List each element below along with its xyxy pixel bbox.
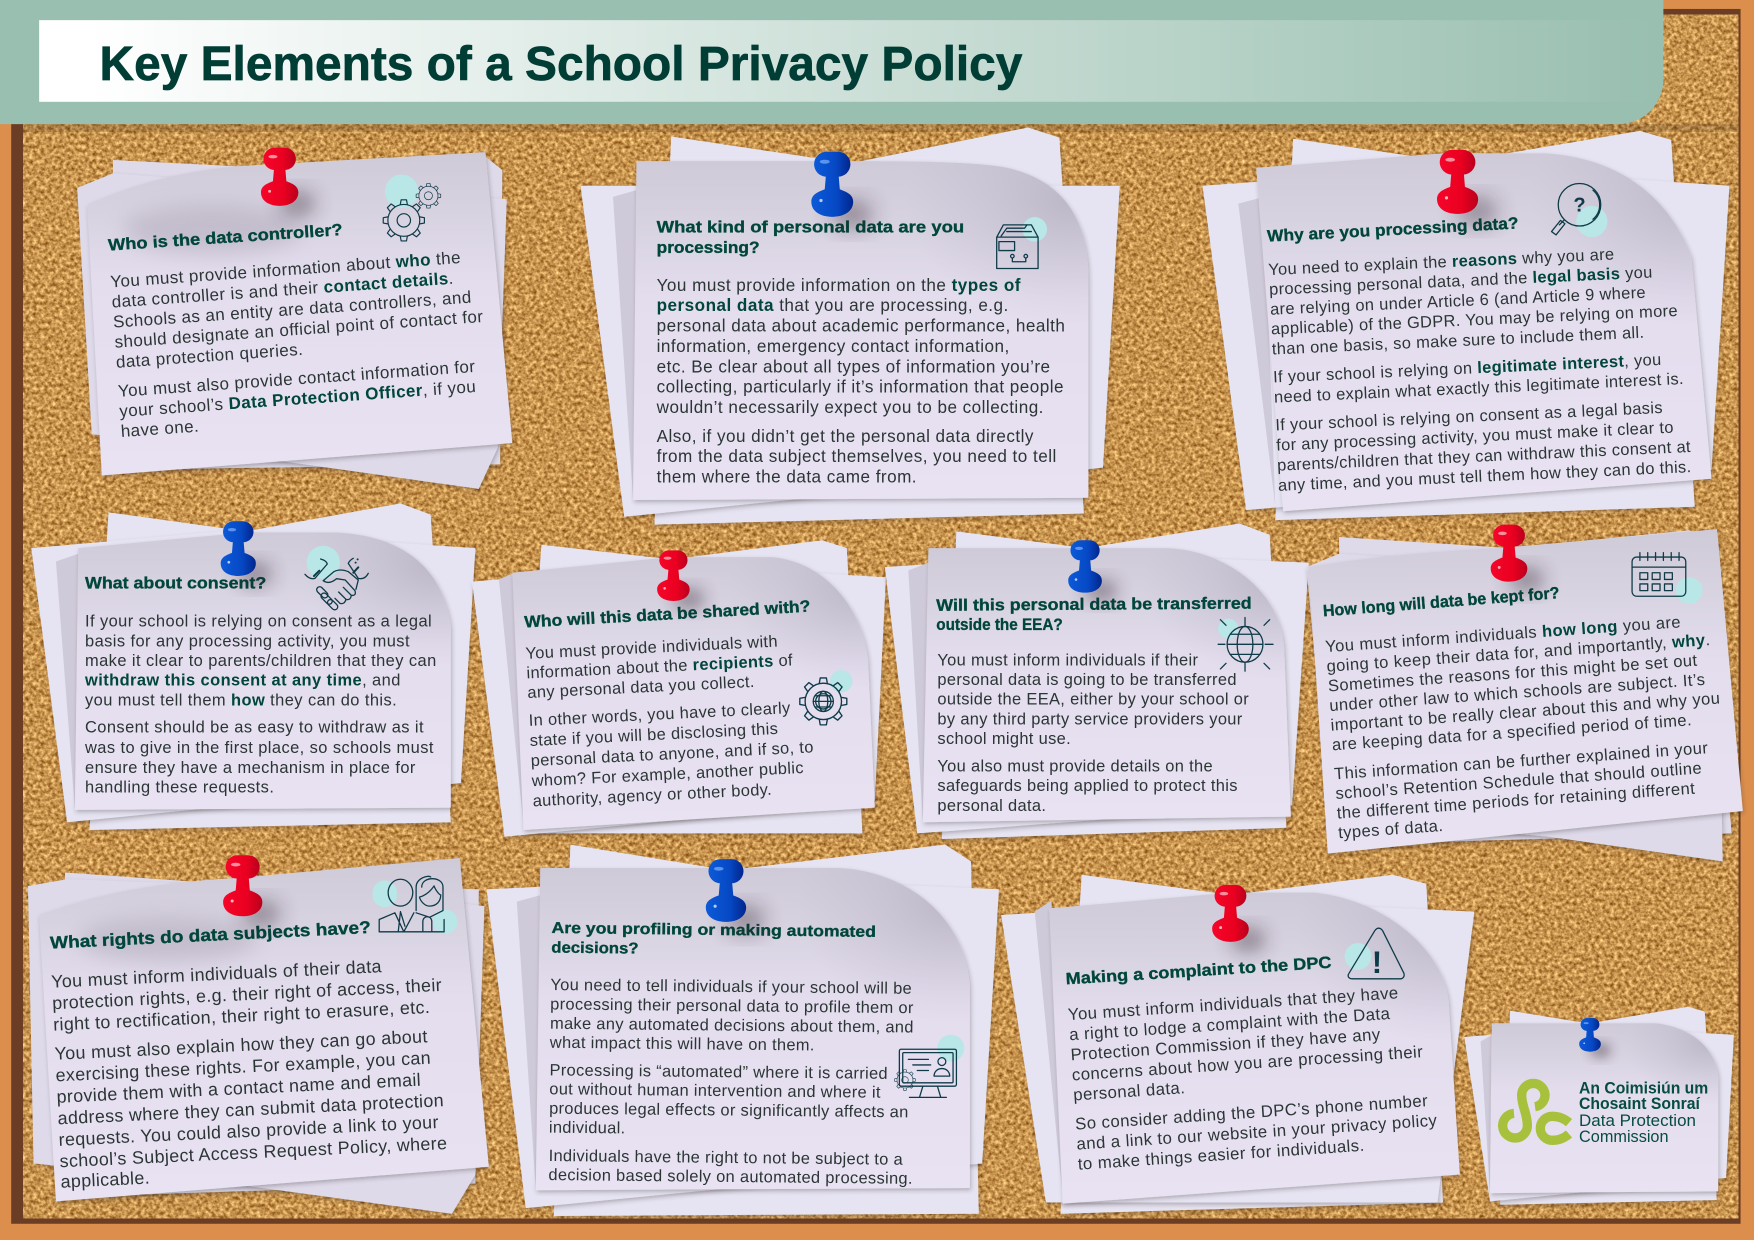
panel: who will this data be shared with (472, 540, 886, 837)
body text: a right to lodge a complaint with the Data (1069, 1004, 1391, 1044)
body text: authority, agency or other body. (532, 781, 772, 810)
body text: ensure they have a mechanism in place for (85, 759, 416, 777)
body text: So consider adding the DPC’s phone number (1075, 1091, 1429, 1134)
body text (1067, 981, 1439, 1174)
body text: Protection Commission if they have any (1070, 1025, 1381, 1064)
heading: What about consent? (85, 574, 266, 592)
body text: data protection queries. (115, 340, 304, 372)
body text: withdraw this consent at any time, and (84, 672, 401, 690)
panel: how long will data be kept for (1307, 525, 1743, 861)
panel: making a complaint to the DPC (1001, 875, 1474, 1214)
body text: personal data. (937, 797, 1046, 815)
paper stack (487, 845, 999, 1216)
panel: transfer outside the EEA (885, 524, 1309, 839)
body text: school’s Retention Schedule that should outline (1335, 758, 1703, 803)
body text: You must also explain how they can go about (54, 1026, 428, 1064)
body text: state if you will be disclosing this (529, 720, 779, 750)
body text: You need to tell individuals if your school will be (550, 976, 912, 998)
body text: processing personal data, and the legal basis you (1269, 263, 1653, 299)
body text: types of data. (1338, 816, 1444, 842)
heading: decisions? (551, 940, 639, 958)
paper stack (28, 858, 489, 1214)
body text: to make things easier for individuals. (1077, 1136, 1365, 1174)
body text: Processing is “automated” where it is carried (549, 1061, 888, 1083)
body text: This information can be further explained in your (1333, 738, 1709, 783)
body text: You need to explain the reasons why you are (1268, 245, 1615, 279)
heading: Are you profiling or making automated (551, 920, 876, 941)
body text: the different time periods for retaining different (1336, 779, 1696, 823)
body text: outside the EEA, either by your school or (937, 691, 1249, 709)
body text: personal data is going to be transferred (937, 671, 1237, 689)
panel: Data Protection Commission logo (1464, 1007, 1734, 1205)
logo text (1579, 1079, 1708, 1146)
body text (1325, 610, 1728, 842)
icon: monitor with person (895, 1035, 964, 1097)
body text: You must also provide contact information for (117, 357, 476, 401)
body text: You must inform individuals how long you are (1325, 612, 1682, 656)
body text: personal data. (1073, 1078, 1186, 1105)
pin (657, 550, 705, 610)
title banner (0, 0, 1663, 124)
heading: How long will data be kept for? (1322, 584, 1560, 620)
logo text: Commission (1579, 1127, 1669, 1146)
pin (261, 148, 315, 216)
icon: gears (383, 175, 441, 241)
body text: right to rectification, their right to erasure, etc. (53, 997, 431, 1035)
body text: Also, if you didn’t get the personal data directly (657, 427, 1034, 446)
body text: You must inform individuals if their (937, 652, 1198, 670)
body text (524, 631, 816, 810)
body text: should designate an official point of contact for (114, 307, 484, 352)
icon: two people (373, 876, 458, 934)
paper stack (885, 524, 1309, 839)
pin (1212, 885, 1266, 952)
body text: data controller is and their contact details. (111, 269, 454, 312)
logo text: An Coimisiún um (1579, 1079, 1708, 1098)
body text: important to be really clear about this and why you (1330, 689, 1721, 735)
body text: protection rights, e.g. their right of access, their (52, 975, 442, 1013)
body text: your school’s Data Protection Officer, if you (119, 377, 477, 421)
body text: If your school is relying on legitimate interest, you (1273, 351, 1662, 386)
body text: You also must provide details on the (937, 757, 1213, 775)
body text: address where they can submit data protection (57, 1090, 444, 1128)
body text: whom? For example, another public (530, 759, 804, 790)
body text: You must provide information on the types of (657, 276, 1021, 295)
icon: magnifier with question mark (1552, 183, 1607, 237)
logo mark (1503, 1083, 1569, 1140)
body text: personal data that you are processing, e.g. (657, 296, 1009, 315)
icon: gear with globe (800, 670, 852, 725)
heading: Will this personal data be transferred (936, 595, 1252, 615)
body text (51, 953, 451, 1192)
panel: what kind of personal data (581, 128, 1120, 525)
body text: etc. Be clear about all types of information you’re (657, 357, 1051, 376)
body text: make any automated decisions about them, and (550, 1015, 914, 1036)
body text: personal data about academic performance, health (657, 317, 1065, 336)
body text: handling these requests. (85, 779, 274, 797)
body text: Schools as an entity are data controllers, and (113, 288, 472, 332)
body text: and a link to our website in your privacy policy (1076, 1111, 1438, 1154)
body text (84, 612, 437, 797)
body text: any time, and you must tell them how they can do this. (1278, 458, 1692, 495)
body text: personal data to anyone, and if so, to (530, 738, 814, 770)
icon: handshake (305, 546, 368, 611)
pin (223, 855, 280, 927)
body text: If your school is relying on consent as a legal (85, 612, 432, 630)
body text: safeguards being applied to protect this (937, 777, 1238, 795)
paper stack (1307, 529, 1743, 861)
icon: warning triangle: ! (1372, 945, 1382, 980)
body text: make it clear to parents/children that they can (85, 652, 437, 670)
body text: you must tell them how they can do this. (85, 691, 397, 709)
body text: information, emergency contact information, (657, 337, 1010, 356)
heading: What kind of personal data are you (657, 219, 964, 237)
body text: going to keep their data for, and importantly, why. (1326, 630, 1711, 676)
icon: filing box (997, 217, 1047, 268)
body text: In other words, you have to clearly (528, 699, 791, 730)
body text: exercising these rights. For example, you can (55, 1048, 431, 1085)
title: Key Elements of a School Privacy Policy (100, 37, 1023, 91)
body text: If your school is relying on consent as a legal basis (1275, 399, 1663, 435)
pin (706, 859, 765, 933)
logo text: Chosaint Sonraí (1579, 1094, 1701, 1113)
panel: why are you processing data (1203, 131, 1729, 520)
body text: requests. You could also provide a link to your (58, 1112, 439, 1150)
logo text: Data Protection (1579, 1111, 1696, 1130)
body text: Sometimes the reasons for this might be set out (1327, 651, 1698, 695)
body text: You must provide individuals with (525, 633, 778, 663)
heading (551, 920, 876, 960)
heading: Who is the data controller? (108, 221, 343, 255)
body text (547, 976, 915, 1188)
paper stack (77, 152, 512, 489)
body text: school’s Subject Access Request Policy, where (59, 1133, 448, 1171)
heading: processing? (657, 239, 760, 257)
icon: globe with arrows (1218, 617, 1273, 671)
body text: what impact this will have on them. (549, 1034, 815, 1054)
body text: them where the data came from. (657, 468, 917, 487)
panel: profiling or automated decisions (487, 845, 999, 1216)
body text: basis for any processing activity, you must (85, 633, 410, 651)
pin (221, 521, 272, 585)
body text: provide them with a contact name and email (56, 1070, 421, 1107)
heading: Why are you processing data? (1267, 214, 1519, 246)
body text: wouldn’t necessarily expect you to be collecting. (656, 398, 1044, 417)
panel: who is the data controller (77, 148, 512, 489)
body text: decision based solely on automated processing. (548, 1166, 913, 1188)
body text: Consent should be as easy to withdraw as it (85, 719, 424, 737)
body text (110, 247, 490, 441)
body text: parents/children that they can withdraw this consent at (1277, 438, 1691, 475)
body text (937, 652, 1249, 815)
body text: under other law to which schools are subject. It’s (1329, 670, 1706, 715)
body text (656, 276, 1065, 487)
panel: what rights do data subjects have (28, 855, 489, 1214)
heading (657, 219, 964, 257)
paper stack (1464, 1007, 1734, 1205)
body text: need to explain what exactly this legitimate interest is. (1274, 370, 1684, 407)
paper stack (581, 128, 1120, 525)
body text: You must inform individuals of their data (51, 956, 382, 992)
body text: individual. (549, 1119, 626, 1137)
body text: than one basis, so make sure to include them all. (1271, 324, 1645, 359)
body text: are relying on under Article 6 (and Article 9 where (1270, 284, 1646, 319)
icon: warning triangle (1345, 928, 1404, 980)
pin (1437, 150, 1497, 225)
paper stack (472, 540, 886, 837)
heading: What rights do data subjects have? (50, 917, 371, 953)
pin (1579, 1018, 1611, 1058)
heading: outside the EEA? (936, 616, 1063, 634)
body text: have one. (120, 417, 200, 441)
body text: concerns about how you are processing their (1071, 1042, 1424, 1084)
body text: applicable) of the GDPR. You may be relying on more (1271, 302, 1678, 338)
body text: processing their personal data to profile them or (550, 995, 914, 1017)
body text: You must provide information about who the (110, 248, 461, 291)
body text: out without human intervention and where it (549, 1080, 881, 1102)
body text: any personal data you collect. (527, 673, 755, 702)
icon: magnifier with question mark: ? (1573, 194, 1586, 216)
body text: You must inform individuals that they have (1067, 983, 1399, 1024)
panel: what about consent (31, 503, 475, 830)
paper stack (1203, 131, 1729, 520)
body text: for any processing activity, you must make it clear to (1276, 419, 1674, 455)
body text: from the data subject themselves, you need to tell (657, 447, 1057, 466)
body text: applicable. (60, 1168, 150, 1192)
pin (1491, 525, 1544, 592)
body text: are keeping data for a specified period of time. (1331, 710, 1693, 754)
body text: collecting, particularly if it’s information that people (657, 378, 1064, 397)
heading: Who will this data be shared with? (524, 598, 811, 632)
body text: Individuals have the right to not be subject to a (549, 1147, 904, 1169)
body text (1268, 242, 1692, 495)
body text: produces legal effects or significantly affects an (549, 1100, 909, 1121)
icon: calendar (1632, 553, 1703, 604)
body text: information about the recipients of (526, 651, 793, 682)
heading (936, 595, 1252, 634)
paper stack (1001, 875, 1474, 1214)
body text: by any third party service providers your (937, 710, 1243, 728)
body text: was to give in the first place, so schools must (84, 739, 434, 757)
paper stack (31, 503, 475, 830)
pin (1068, 540, 1117, 602)
heading: Making a complaint to the DPC (1065, 954, 1332, 988)
pin (811, 152, 872, 228)
body text: school might use. (937, 730, 1071, 748)
